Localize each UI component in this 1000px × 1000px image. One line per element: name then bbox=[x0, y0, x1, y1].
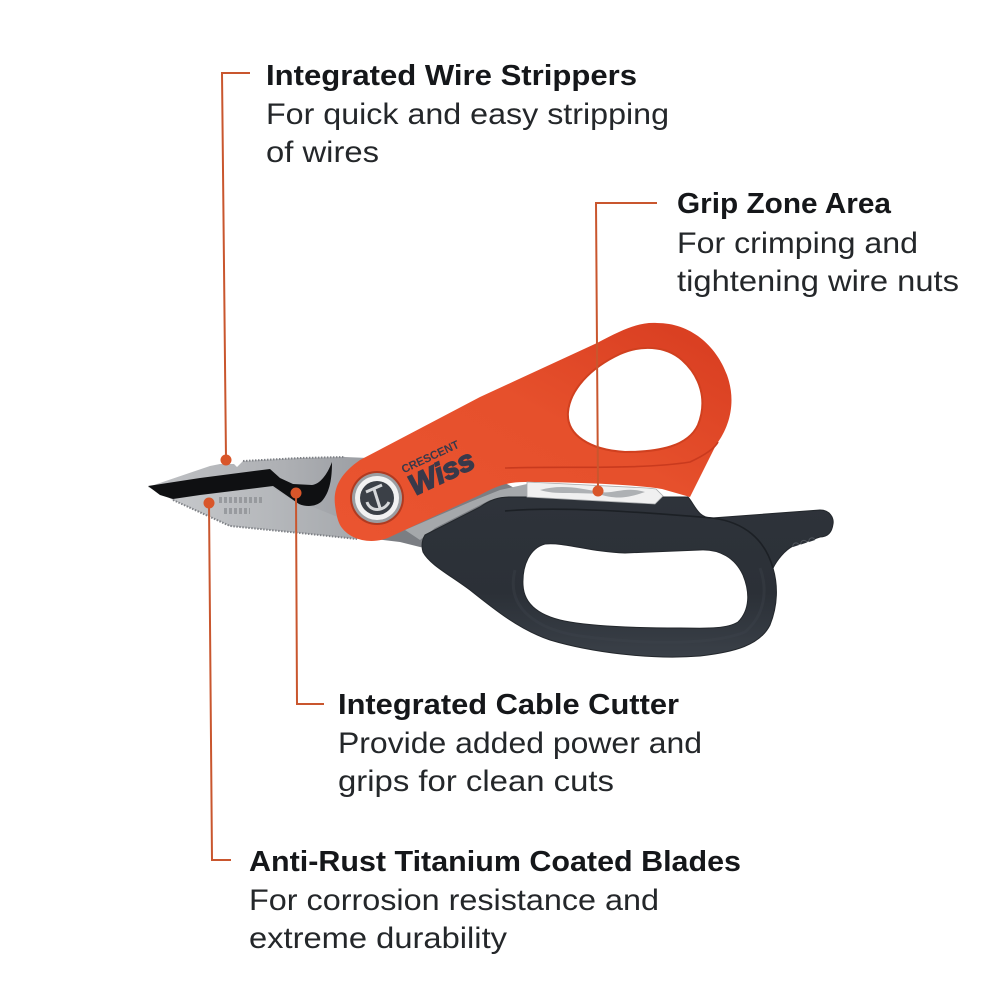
brand logo: Wiss bbox=[404, 444, 480, 502]
marker dot bbox=[592, 486, 604, 496]
heading: Grip Zone Area bbox=[677, 188, 892, 220]
callout: integrated wire strippers bbox=[220, 60, 669, 466]
description: grips for clean cuts bbox=[338, 765, 614, 798]
description bbox=[266, 98, 669, 169]
upper blade bbox=[148, 457, 372, 539]
brand logo: CRESCENT bbox=[400, 439, 461, 476]
marker dot bbox=[204, 498, 214, 508]
description bbox=[677, 227, 959, 298]
leader line bbox=[296, 493, 324, 704]
description bbox=[338, 727, 702, 798]
thumb rest teeth bbox=[793, 538, 815, 547]
description: Provide added power and bbox=[338, 727, 702, 760]
description: For corrosion resistance and bbox=[249, 884, 659, 917]
grip zone plate bbox=[527, 482, 663, 504]
lower blade tip bbox=[173, 486, 357, 539]
handle inner contour bbox=[505, 509, 773, 568]
lower blade root bbox=[350, 480, 530, 549]
leader line bbox=[209, 503, 231, 860]
description: of wires bbox=[266, 136, 379, 169]
heading: Integrated Cable Cutter bbox=[338, 689, 679, 721]
blade serrations bbox=[173, 457, 357, 539]
orange handle bbox=[335, 323, 731, 541]
blade cutting slot and cable cutter bbox=[148, 462, 332, 506]
heading: Anti-Rust Titanium Coated Blades bbox=[249, 846, 741, 878]
leader line bbox=[222, 73, 250, 459]
heading: Integrated Wire Strippers bbox=[266, 60, 637, 92]
description: For quick and easy stripping bbox=[266, 98, 669, 131]
handle ridge highlight bbox=[513, 568, 764, 642]
metal highlight under handle bbox=[405, 484, 527, 540]
pivot screw bbox=[350, 471, 404, 525]
description: extreme durability bbox=[249, 922, 507, 955]
description: tightening wire nuts bbox=[677, 265, 959, 298]
scissors illustration bbox=[148, 323, 833, 657]
orange hole shading bbox=[568, 348, 702, 452]
marker dot bbox=[290, 488, 302, 498]
callout: grip zone area bbox=[592, 188, 959, 496]
description: For crimping and bbox=[677, 227, 918, 260]
black handle bbox=[422, 497, 833, 657]
blade etched marking bbox=[219, 500, 263, 511]
marker dot bbox=[220, 454, 232, 466]
description bbox=[249, 884, 659, 955]
callout: anti-rust titanium coated blades bbox=[204, 498, 741, 955]
orange handle contour bbox=[505, 442, 718, 468]
callout: integrated cable cutter bbox=[290, 488, 702, 798]
leader line bbox=[596, 203, 657, 491]
